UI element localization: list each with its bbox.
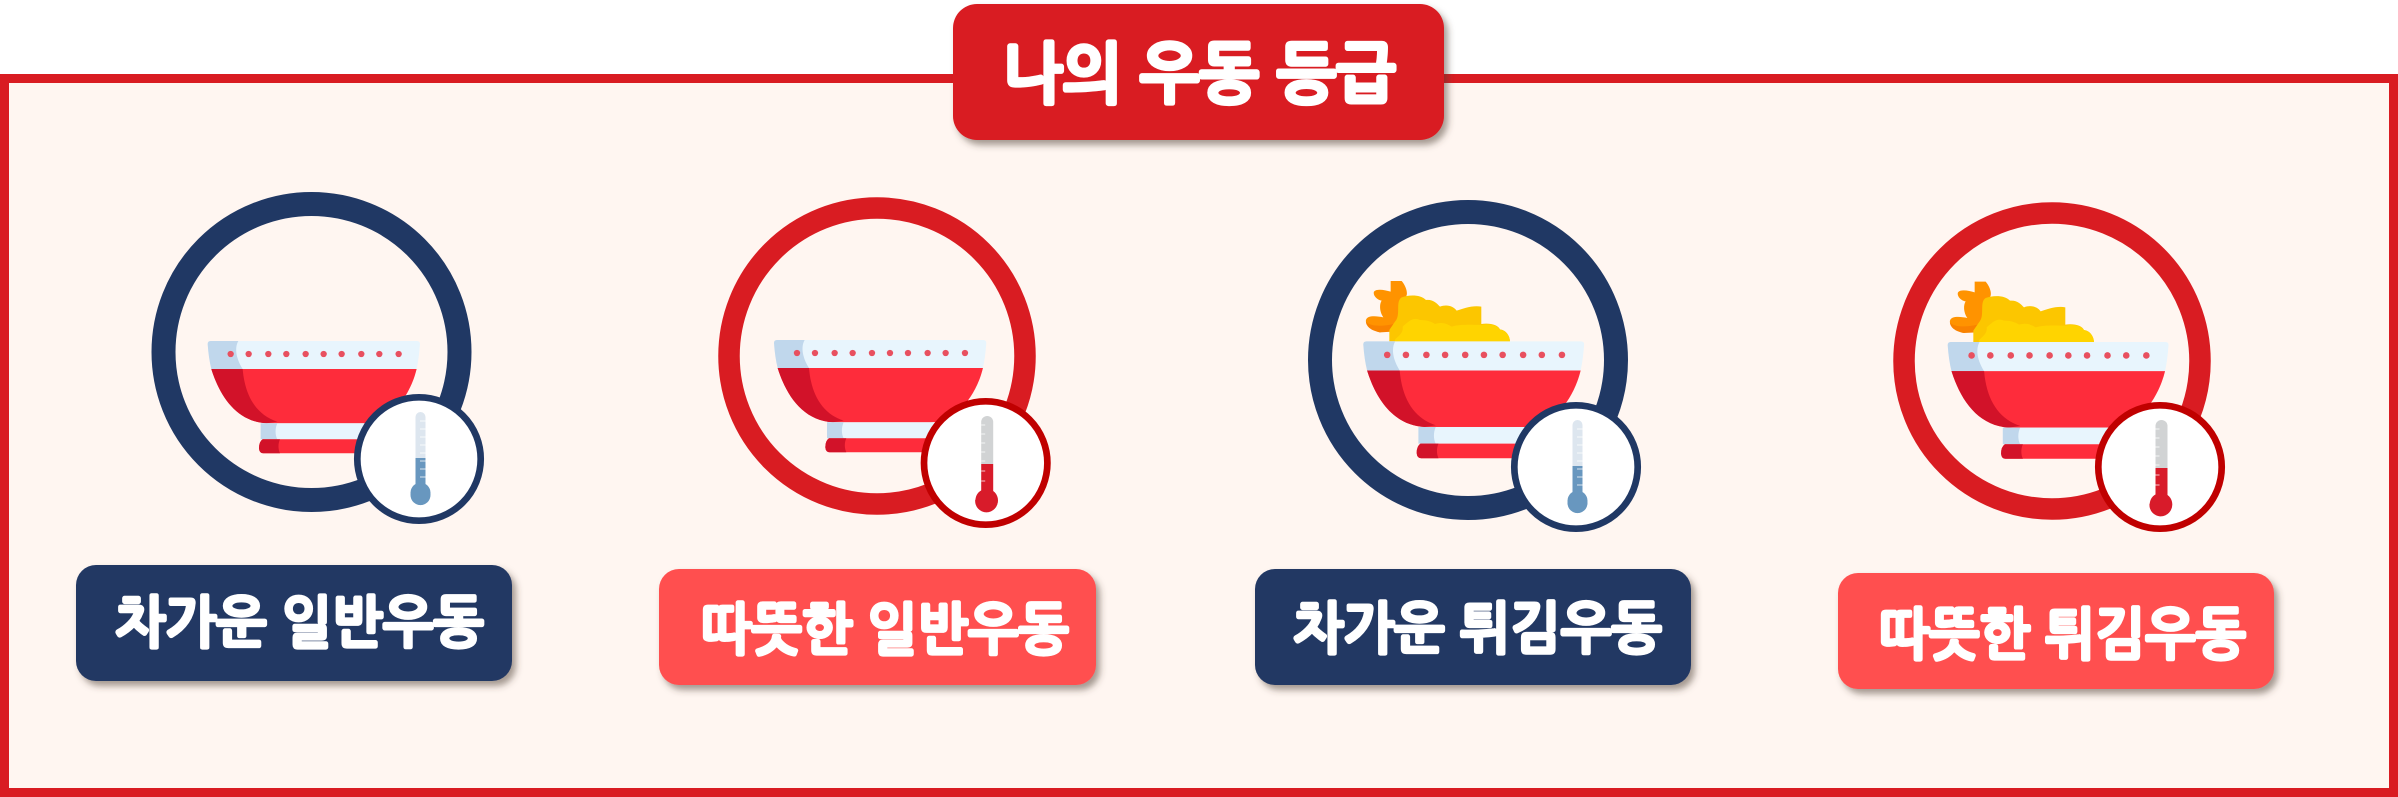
label: warm plain udon: 따뜻한 일반우동: [701, 598, 1069, 661]
ring: red: [1904, 213, 2200, 509]
label: cold plain udon: [76, 565, 512, 681]
grade 2: warm plain udon: [729, 208, 1047, 525]
label: warm tempura udon: [1838, 573, 2274, 689]
icon: tempura: [1950, 282, 2094, 342]
icon: bowl: [1363, 341, 1584, 458]
icon: tempura: [1366, 281, 1510, 341]
label: warm tempura udon: 따뜻한 튀김우동: [1879, 603, 2246, 666]
title badge: [953, 4, 1444, 140]
ring: navy: [164, 204, 460, 500]
label: cold tempura udon: 차가운 튀김우동: [1293, 597, 1662, 660]
icon: cold thermometer: [357, 397, 481, 521]
icon: cold thermometer: [1514, 405, 1638, 529]
ring: navy: [1320, 212, 1616, 508]
label: cold tempura udon: [1255, 569, 1691, 685]
label: warm plain udon: [659, 569, 1096, 685]
icon: hot thermometer: [2098, 405, 2222, 529]
grade 4: warm tempura udon: [1904, 213, 2222, 529]
title: 나의 우동 등급: [1003, 37, 1396, 111]
grade 1: cold plain udon: [164, 204, 481, 521]
ring: red: [729, 208, 1025, 504]
icon: bowl: [774, 340, 986, 452]
icon: hot thermometer: [924, 401, 1047, 525]
icon: bowl: [1948, 342, 2169, 459]
label: cold plain udon: 차가운 일반우동: [115, 591, 484, 654]
icon: bowl: [208, 341, 420, 453]
grade 3: cold tempura udon: [1320, 212, 1638, 529]
